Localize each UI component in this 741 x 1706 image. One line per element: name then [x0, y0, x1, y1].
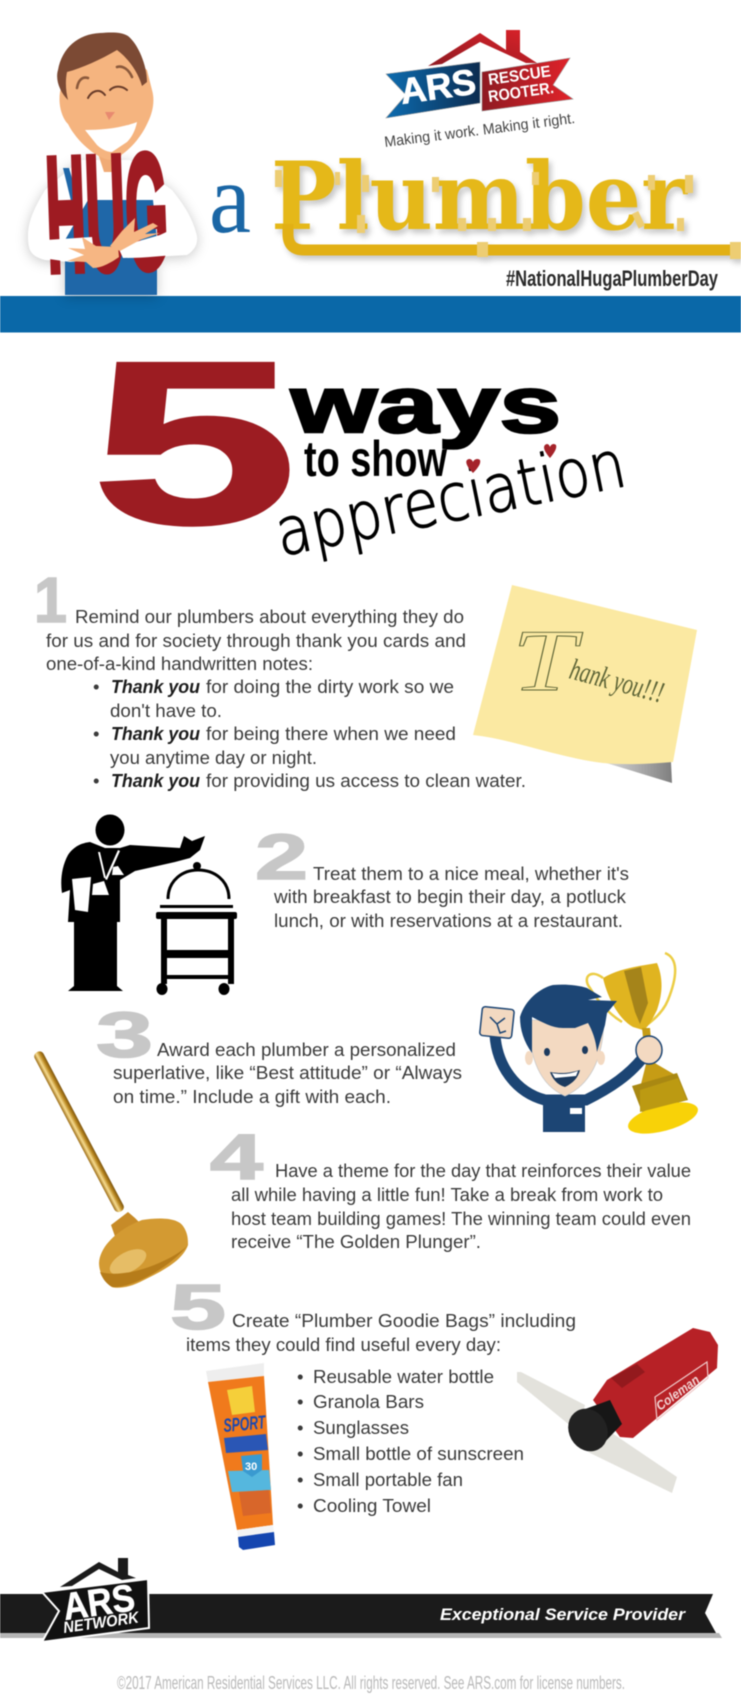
goodie list: •: [297, 1495, 303, 1516]
step 1 text: •: [93, 676, 99, 697]
lower hand: [67, 237, 119, 268]
goodie list: Sunglasses: [313, 1417, 409, 1438]
crossed arms: [28, 205, 197, 268]
hearts: [466, 444, 556, 473]
ARS Rescue Rooter logo: [383, 30, 576, 151]
step 5: [170, 1271, 718, 1550]
goodie list: •: [297, 1469, 303, 1490]
goodie list: •: [297, 1391, 303, 1412]
portable fan: [517, 1328, 718, 1493]
step 3 text: superlative, like “Best attitude” or “Always: [113, 1062, 462, 1083]
step 1 text: [46, 606, 526, 791]
logo roof: [60, 1558, 136, 1587]
right fist: [636, 1036, 662, 1064]
goodie list: Granola Bars: [313, 1391, 424, 1412]
step 5 intro text: Create “Plumber Goodie Bags” including: [232, 1310, 576, 1331]
collar badge: [570, 1108, 582, 1114]
step 2 text: with breakfast to begin their day, a potluck: [273, 886, 627, 907]
number 1: 1: [34, 564, 67, 636]
black hub: [561, 1400, 622, 1459]
sticky note: [473, 585, 697, 783]
cart with cloche: [156, 862, 237, 995]
step 4 text: Have a theme for the day that reinforces their value: [275, 1160, 691, 1181]
nose: [105, 112, 115, 120]
step 1 text: Thank you: [111, 770, 200, 791]
step 3 text: on time.” Include a gift with each.: [113, 1086, 391, 1107]
step 1 text: Thank you: [111, 676, 200, 697]
logo ARS: ARS: [60, 1577, 138, 1629]
ears: [525, 1051, 605, 1065]
handwritten thank you: hank you!!!: [566, 653, 667, 710]
hair: [520, 985, 617, 1053]
blue bar: [0, 296, 741, 332]
step 4 text: all while having a little fun! Take a break from work to: [231, 1184, 663, 1205]
footer banner: [0, 1558, 722, 1642]
step 2 text: Treat them to a nice meal, whether it's: [313, 863, 629, 884]
torso: [543, 1095, 585, 1132]
word: Plumber with pipe: [271, 142, 741, 259]
word: appreciation: appreciation: [269, 425, 632, 572]
left fist: [480, 1006, 514, 1039]
step 1 text: •: [93, 770, 99, 791]
tagline: Exceptional Service Provider: [440, 1605, 686, 1624]
step 3 text: [113, 1039, 462, 1107]
goodie list: Cooling Towel: [313, 1495, 431, 1516]
plumber character: [28, 32, 197, 307]
step 2 text: [273, 863, 629, 931]
title: 5 ways to show appreciation: [91, 313, 632, 572]
step 3: [96, 953, 701, 1140]
big 5: 5: [91, 313, 297, 572]
sunscreen tube: [206, 1363, 275, 1550]
header banner: [0, 30, 741, 332]
neck: [92, 135, 128, 172]
step 1 text: •: [93, 723, 99, 744]
pipe couplings: [275, 170, 741, 259]
trophy base: [632, 1073, 688, 1112]
golden plunger: [33, 1050, 188, 1288]
tagline: Making it work. Making it right.: [383, 110, 576, 151]
step 2: [61, 814, 629, 995]
step 4: [33, 1050, 691, 1288]
goodie list: Small portable fan: [313, 1469, 463, 1490]
band shadow: [0, 1633, 722, 1638]
red body: [593, 1328, 718, 1438]
step 1 text: don't have to.: [110, 700, 222, 721]
step 1 text: Remind our plumbers about everything they do: [75, 606, 464, 627]
shirt and overalls: [28, 160, 197, 295]
Plumber lettering: Plumber: [271, 142, 688, 252]
ARS Network logo: [42, 1558, 149, 1642]
upper hand: [110, 218, 160, 251]
SPF badge: [241, 1454, 262, 1477]
red ribbon: ROOTER.: [487, 80, 555, 106]
word: to show: to show: [304, 431, 447, 487]
smile: [85, 122, 137, 152]
number 5: 5: [170, 1271, 226, 1343]
step 4 text: receive “The Golden Plunger”.: [231, 1231, 481, 1252]
word: a: a: [209, 143, 251, 254]
goodie list: Small bottle of sunscreen: [313, 1443, 524, 1464]
word: ways: ways: [290, 360, 561, 449]
black band: [0, 1594, 716, 1633]
goodie list: Reusable water bottle: [313, 1366, 494, 1387]
trophy: [587, 953, 701, 1140]
plunger cup: [99, 1212, 188, 1288]
red ribbon: RESCUE: [487, 63, 552, 89]
hair: [57, 32, 147, 100]
step 1 text: for being there when we need: [206, 723, 456, 744]
step 1 text: one-of-a-kind handwritten notes:: [46, 653, 313, 674]
SPF badge: 30: [245, 1461, 257, 1473]
goodie list: [297, 1366, 524, 1516]
step 1 text: for providing us access to clean water.: [206, 770, 526, 791]
step 1 text: Thank you: [111, 723, 200, 744]
red ribbon: [482, 58, 573, 111]
waiter icon: [61, 814, 205, 991]
fan blades: [517, 1372, 585, 1432]
step 3 text: Award each plumber a personalized: [157, 1039, 456, 1060]
trophy stem: [640, 1028, 677, 1088]
step 2 text: lunch, or with reservations at a restaurant.: [274, 910, 623, 931]
handle: [33, 1050, 125, 1214]
goodie list: •: [297, 1366, 303, 1387]
step 5 intro text: [186, 1310, 576, 1355]
coleman label: Coleman: [653, 1372, 702, 1413]
goodie list: •: [297, 1443, 303, 1464]
number 2: 2: [255, 821, 308, 893]
step 4 text: host team building games! The winning team could even: [231, 1208, 691, 1229]
logo NETWORK: NETWORK: [62, 1609, 141, 1637]
step 1: [34, 564, 697, 791]
sunscreen label text: SPORT: [223, 1412, 267, 1437]
face: [59, 45, 153, 160]
arms: [495, 1035, 645, 1100]
step 1 text: for doing the dirty work so we: [206, 676, 454, 697]
number 3: 3: [96, 999, 153, 1071]
number 4: 4: [210, 1121, 264, 1193]
handwritten thank you: [512, 613, 667, 710]
logo tag: [42, 1579, 149, 1642]
step 4 text: [231, 1160, 691, 1252]
step 5 intro text: items they could find useful every day:: [186, 1334, 501, 1355]
pipe: [288, 224, 741, 250]
eyes: [544, 1046, 588, 1056]
winner with trophy: [480, 953, 701, 1140]
handwritten thank you: T: [512, 613, 584, 710]
eyes and brows: [77, 67, 132, 98]
face: [528, 1020, 604, 1096]
step 1 text: you anytime day or night.: [110, 747, 317, 768]
smile: [550, 1070, 580, 1087]
header banner: HUG: [43, 119, 171, 307]
waiter shirt and towel: [72, 850, 124, 912]
blue ribbon: ARS: [397, 61, 478, 112]
goodie list: •: [297, 1417, 303, 1438]
roof: [428, 30, 537, 66]
step 1 text: for us and for society through thank you cards and: [46, 630, 466, 651]
